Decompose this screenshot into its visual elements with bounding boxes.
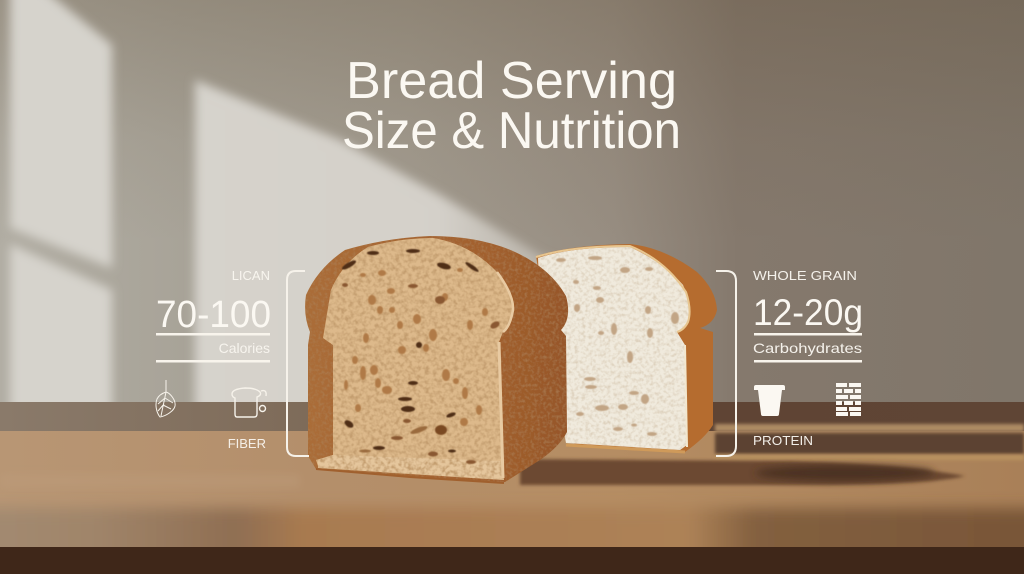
right side bands on table bbox=[715, 424, 1024, 432]
label: PROTEIN: PROTEIN bbox=[753, 433, 813, 448]
value: 70-100: 70-100 bbox=[156, 294, 271, 336]
icon: cup bbox=[754, 385, 785, 416]
icon: bread bbox=[232, 388, 266, 417]
icon: leaf bbox=[156, 380, 175, 417]
whole wheat bread slice (front) bbox=[305, 236, 568, 483]
crumb bottom rim bbox=[318, 455, 504, 480]
title: Bread Serving bbox=[346, 52, 677, 110]
wooden table bbox=[0, 402, 1024, 574]
tan crumb dimples bbox=[344, 268, 488, 426]
title: Size & Nutrition bbox=[342, 102, 681, 160]
bread shadow on table bbox=[520, 459, 965, 485]
crust of back loaf bbox=[536, 244, 717, 452]
label: LICAN: LICAN bbox=[232, 268, 270, 283]
right bracket bbox=[716, 271, 736, 456]
window light patches on wall bbox=[10, 0, 660, 430]
crumb of back loaf bbox=[538, 247, 689, 450]
right stat panel: carbohydrates bbox=[753, 268, 863, 448]
lower wood shading bbox=[0, 502, 1024, 547]
white bread slice (back) bbox=[536, 244, 717, 452]
table front edge bbox=[0, 547, 1024, 574]
caption: Calories: Calories bbox=[219, 340, 270, 356]
value: 12-20g: 12-20g bbox=[753, 292, 863, 333]
label: FIBER: FIBER bbox=[228, 436, 266, 451]
caption: Carbohydrates: Carbohydrates bbox=[753, 340, 862, 356]
icon: brick wall bbox=[836, 383, 861, 416]
left stat panel: calories bbox=[156, 268, 271, 451]
dark crumb holes bbox=[341, 249, 501, 464]
crumb of front loaf bbox=[316, 238, 513, 476]
crumb pockets bbox=[556, 256, 679, 436]
title bbox=[342, 52, 681, 160]
grain line bbox=[0, 474, 300, 488]
background wall bbox=[0, 0, 1024, 430]
left bracket bbox=[287, 271, 309, 456]
label: WHOLE GRAIN: WHOLE GRAIN bbox=[753, 268, 857, 283]
crust of front loaf bbox=[305, 236, 568, 482]
